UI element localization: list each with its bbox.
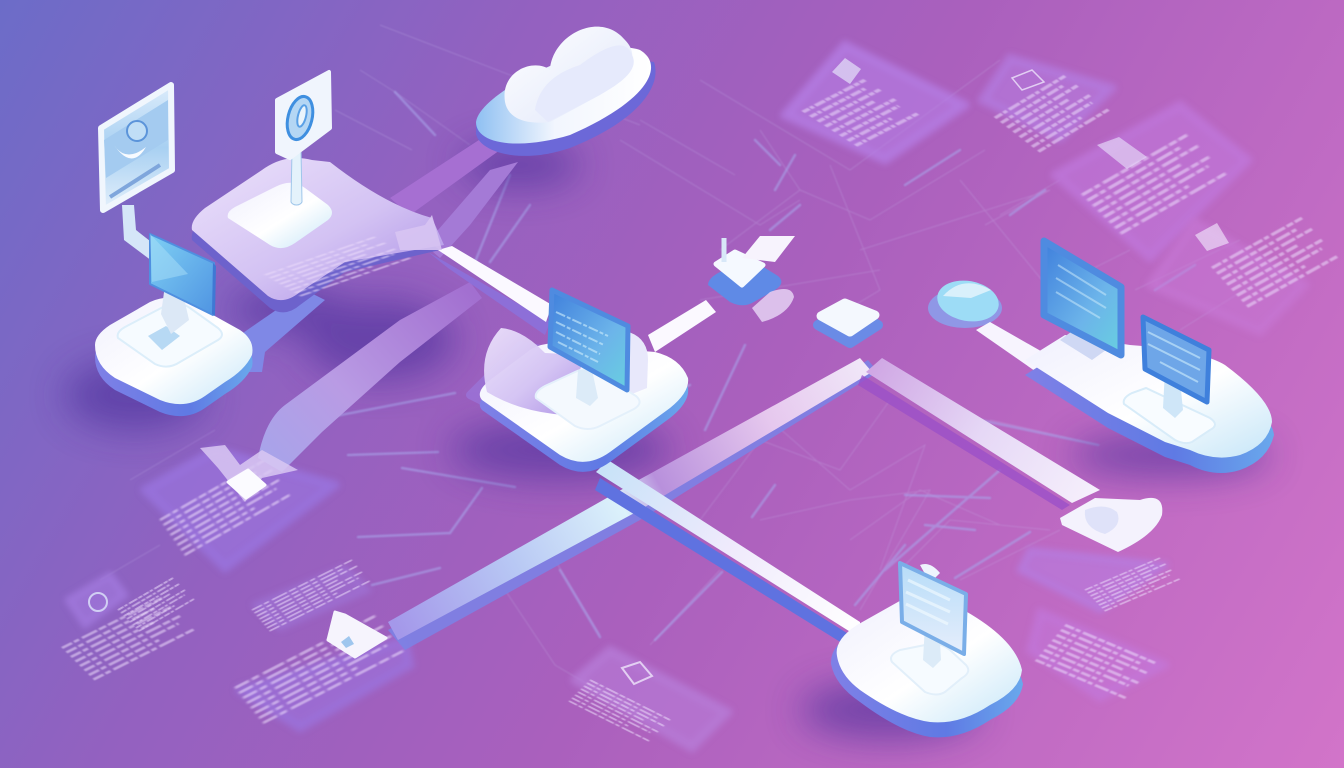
platform side (1025, 350, 1274, 473)
panel: text card under right cloud (1020, 550, 1180, 611)
monitor text lines (556, 312, 608, 362)
panel: left text card with tab icon (145, 450, 335, 568)
translucent under-panel (470, 345, 600, 455)
panel: top right text card (982, 58, 1112, 152)
node: centre platform with monitor (470, 290, 688, 472)
network of thin connector lines (100, 25, 1260, 715)
link beam (976, 322, 1060, 378)
node: right white cloud on card (1060, 498, 1162, 552)
platform top (837, 598, 1022, 722)
cloud base side (476, 60, 656, 156)
panel: lower right text card (1030, 612, 1165, 698)
node: right platform with two monitors (976, 241, 1274, 473)
panel: top centre text card (785, 45, 965, 160)
node: left platform with monitor (95, 85, 252, 416)
cloud body (505, 27, 632, 123)
platform top (480, 343, 688, 462)
panel: far left text card with icon (62, 575, 194, 680)
inner pad (536, 369, 640, 429)
monitor (150, 234, 214, 315)
panel: far right text card (1150, 218, 1337, 332)
panel: lavender platform with pedestal (192, 72, 444, 312)
connector: left node to lavender platform (240, 290, 325, 372)
icon: at-sign sign (277, 72, 330, 158)
platform top (1025, 335, 1272, 458)
monitor (900, 563, 966, 654)
ribbon: left platform to lower-left node (258, 282, 482, 472)
panel: bottom centre text card (569, 650, 728, 748)
text on lavender platform (265, 237, 410, 296)
stand from sign to monitor (122, 205, 164, 264)
icon: small device bottom-left (328, 612, 386, 657)
beam: centre to node (648, 300, 716, 352)
platform side (831, 606, 1023, 737)
node: rounded cube (818, 303, 878, 343)
monitor (550, 290, 628, 390)
icon: small device lower-left (200, 445, 298, 502)
platform top (95, 298, 252, 404)
panel: right text card with icon (1055, 105, 1248, 258)
pedestal (228, 183, 332, 248)
beam: right diagonal to cloud (858, 358, 1100, 510)
back cloud (484, 328, 585, 415)
back monitor (1044, 241, 1121, 355)
inner pad (118, 303, 222, 367)
beam: long diagonal to bottom platform (595, 460, 860, 648)
front monitor (1143, 317, 1209, 402)
node: small tower device (708, 236, 795, 322)
panel: small left text card (252, 560, 370, 631)
panel: bottom left text card (235, 616, 410, 728)
cloud base top (476, 47, 651, 144)
platform side (480, 353, 688, 472)
pad (1124, 388, 1215, 443)
node: blue dome (928, 276, 1002, 328)
sign card (101, 85, 172, 210)
platform side (95, 310, 252, 416)
beam: long diagonal to upper right (388, 358, 878, 650)
soft shadows under platforms (65, 143, 1270, 740)
pedestal pole (291, 150, 302, 205)
pad (891, 644, 968, 694)
node: bottom platform with monitor (831, 563, 1023, 737)
node: top cloud (476, 27, 656, 156)
beam: white link lavender platform to centre (395, 215, 552, 335)
ribbon: cloud to left platform (390, 138, 518, 258)
